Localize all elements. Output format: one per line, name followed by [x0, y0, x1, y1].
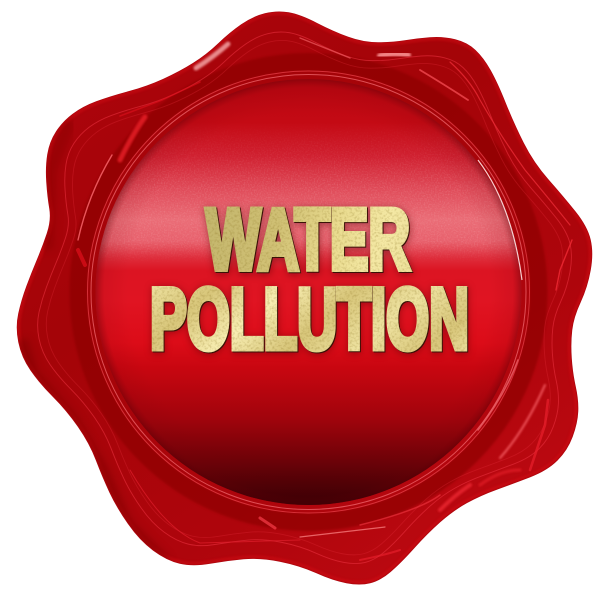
- contour lines following the wax edge: [38, 32, 571, 564]
- title soft glow: [150, 194, 470, 369]
- outer rings of the disc: [88, 71, 530, 513]
- title hard edge: [151, 193, 470, 368]
- title: water pollution: [150, 192, 470, 369]
- white rim glint on the disc: [478, 160, 522, 280]
- title hard edge: WATER: [207, 193, 411, 289]
- central disc: [90, 79, 530, 505]
- title soft glow: WATER: [207, 194, 411, 290]
- dark band around the disc: [78, 62, 538, 522]
- title gold text: [150, 192, 469, 368]
- wax highlights and folds: [78, 38, 572, 560]
- title gold text: WATER: [206, 192, 410, 288]
